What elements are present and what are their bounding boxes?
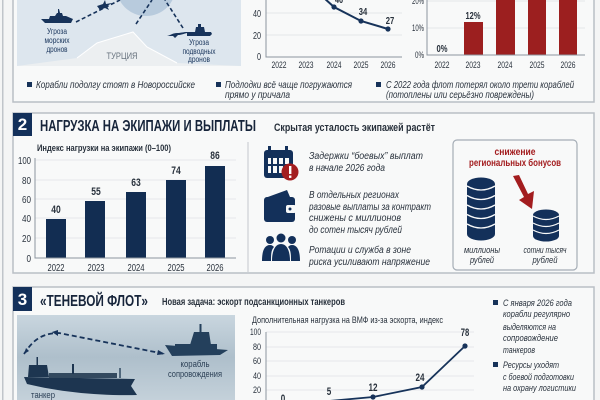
bar chart: crew load index — [18, 143, 236, 274]
bar chart: share of losses: 10% — [412, 23, 424, 34]
bar chart: share of losses: 12% — [466, 10, 481, 22]
bar chart: crew load index: 20 — [22, 233, 31, 245]
panel 2: crew load and payments — [13, 113, 594, 274]
bar chart: crew load index: 40 — [22, 213, 31, 225]
bullet: escort since January — [493, 298, 572, 356]
line chart: fleet index: 20 — [253, 30, 261, 42]
icon: tanker — [24, 357, 137, 395]
bullet: escort since January: С января 2026 года — [503, 298, 572, 309]
icon: short coin stack — [533, 210, 559, 242]
bar chart: share of losses: 0% — [415, 50, 424, 61]
label: hundreds of thousands — [524, 245, 567, 265]
line chart: extra load: 12 — [368, 382, 378, 394]
line chart: extra load: 80 — [253, 342, 261, 353]
heading: «ТЕНЕВОЙ ФЛОТ» — [40, 291, 148, 310]
bar chart: crew load index: 2024 — [128, 263, 145, 274]
bar chart: share of losses: 0% — [436, 43, 448, 55]
arrow: reduction — [513, 175, 534, 209]
line chart: extra load: Дополнительная нагрузка на ВМФ из-за эскорта, индекс — [252, 315, 443, 325]
bar chart: crew load index: 60 — [22, 194, 31, 206]
subheading: Скрытая усталость экипажей растёт — [274, 122, 435, 134]
bar chart: crew load index: 2025 — [168, 263, 185, 274]
bar chart: share of losses: 2022 — [434, 60, 450, 71]
bar chart: crew load index: 86 — [210, 150, 220, 162]
label: escort ship — [168, 359, 222, 379]
bar chart: crew load index: 0 — [26, 253, 31, 265]
illustration: tanker and escort — [17, 315, 235, 400]
bullet: fleet losses: (потоплены или серьёзно повреждены) — [386, 90, 534, 101]
line chart: extra load: 40 — [253, 371, 261, 382]
bar chart: share of losses: 2024 — [498, 60, 512, 71]
bar chart: crew load index: 63 — [131, 177, 141, 189]
bullet: fleet losses — [376, 79, 574, 101]
icon: drone — [97, 0, 112, 10]
line chart: fleet index: 27 — [386, 15, 394, 27]
icon: group of people — [262, 234, 300, 261]
label: millions: миллионы — [464, 245, 500, 255]
callout: regional bonuses — [453, 140, 577, 270]
bar chart: share of losses: 2023 — [466, 60, 480, 71]
bar chart: crew load index: 2022 — [48, 263, 65, 274]
label: escort ship: корабль — [180, 359, 210, 369]
label: tanker: танкер — [31, 390, 55, 400]
text: contract payouts: В отдельных регионах — [309, 190, 400, 201]
bar chart: crew load index: 55 — [91, 186, 101, 198]
label: hundreds of thousands: сотни тысяч — [524, 245, 567, 255]
bullet: submarines: прямо у причала — [225, 90, 290, 101]
section number 2: 2 — [18, 115, 27, 134]
text: delayed payments — [309, 150, 423, 174]
icon: submarine — [167, 24, 212, 38]
threat label: naval drones: дронов — [46, 45, 68, 54]
bullet: resources diverted: Ресурсы уходят — [503, 360, 559, 371]
bar chart: crew load index: Индекс нагрузки на экипажи (0–100) — [37, 143, 171, 153]
line chart: extra load: 24 — [416, 372, 425, 384]
line chart: extra load: 100 — [250, 327, 261, 338]
bar chart: crew load index: 2023 — [88, 263, 105, 274]
line chart: extra load: 60 — [253, 356, 261, 367]
bar chart: share of losses — [412, 0, 585, 71]
callout: regional bonuses: региональных бонусов — [469, 157, 561, 169]
map: Black Sea threats — [17, 0, 241, 66]
bar chart: crew load index: 40 — [51, 204, 61, 216]
line chart: fleet index: 2024 — [326, 60, 342, 71]
bullet: submarines: Подлодки всё чаще погружаются — [225, 80, 353, 91]
subheading: Новая задача: эскорт подсанкционных танкеров — [162, 296, 345, 308]
line chart: extra load: 78 — [461, 327, 469, 339]
text: contract payouts: разовые выплаты за контракт — [308, 202, 431, 213]
bullet: ships in Novorossiysk: Корабли подолгу стоят в Новороссийске — [36, 79, 195, 91]
bar chart: crew load index: 80 — [22, 175, 31, 187]
heading: НАГРУЗКА НА ЭКИПАЖИ И ВЫПЛАТЫ — [40, 118, 256, 135]
text: delayed payments: в начале 2026 года — [309, 163, 385, 174]
label: millions — [464, 245, 500, 265]
arrow: escort route — [24, 330, 165, 355]
line chart: fleet index: 2023 — [298, 60, 314, 71]
panel 3: shadow fleet — [13, 287, 594, 400]
bullet: escort since January: танкеров — [503, 345, 535, 356]
threat label: underwater drones: подводных — [182, 47, 216, 56]
label: millions: рублей — [469, 255, 494, 265]
bar chart: crew load index: 74 — [171, 165, 181, 177]
icon: escort ship — [165, 324, 228, 356]
label: escort ship: сопровождения — [168, 369, 222, 379]
icon: tall coin stack — [467, 178, 495, 240]
line chart: fleet index: 0 — [257, 51, 261, 63]
bar chart: crew load index: 100 — [18, 155, 31, 167]
section number 3 — [13, 287, 32, 311]
text: contract payouts: снижены с миллионов — [309, 213, 401, 224]
label: hundreds of thousands: рублей — [532, 255, 558, 265]
line chart: fleet index: 2022 — [272, 60, 286, 71]
line chart: extra load — [250, 315, 474, 400]
text: rotations: Ротации и служба в зоне — [309, 244, 411, 256]
icon: warship — [41, 9, 73, 23]
line chart: fleet index — [253, 0, 402, 71]
bullet: submarines — [216, 80, 353, 101]
bullet: resources diverted: с боевой подготовки — [503, 372, 575, 383]
threat label: underwater drones: дронов — [188, 55, 210, 64]
line chart: fleet index: 34 — [359, 6, 367, 18]
bullet: resources diverted — [493, 360, 577, 394]
text: delayed payments: Задержки “боевых” выплат — [309, 150, 423, 162]
line chart: extra load: 5 — [327, 386, 331, 398]
line chart: extra load: 20 — [253, 385, 261, 396]
text: rotations: риска усиливают напряжение — [308, 257, 430, 268]
bar chart: share of losses: 2025 — [530, 60, 544, 71]
bullet: escort since January: сопровождение — [503, 333, 558, 344]
text: contract payouts: до сотен тысяч рублей — [309, 224, 402, 236]
text: rotations — [308, 244, 430, 268]
threat label: underwater drones — [182, 38, 216, 64]
bullet: escort since January: корабли регулярно — [503, 309, 570, 320]
threat label: naval drones: Угроза — [47, 27, 67, 36]
bar chart: share of losses: 2026 — [560, 60, 576, 71]
bullet: resources diverted: на охрану логистики — [503, 383, 577, 394]
line chart: fleet index: 40 — [253, 8, 261, 20]
bullet: escort since January: выделяются на — [503, 322, 556, 333]
panel 1: fleet — [13, 0, 594, 102]
icon: wallet — [264, 190, 296, 222]
text: contract payouts — [308, 190, 431, 236]
threat label: naval drones: морских — [44, 36, 70, 45]
map label: Turkey: ТУРЦИЯ — [106, 51, 138, 62]
icon: calendar with alert — [264, 146, 298, 180]
callout: regional bonuses: снижение — [494, 147, 536, 158]
line chart: fleet index: 2026 — [380, 60, 396, 71]
bar chart: crew load index: 2026 — [206, 263, 224, 274]
section number 2 — [13, 113, 32, 136]
threat label: underwater drones: Угроза — [189, 38, 209, 47]
section number 3: 3 — [18, 290, 27, 309]
threat label: naval drones — [44, 27, 70, 54]
line chart: fleet index: 2025 — [354, 60, 368, 71]
